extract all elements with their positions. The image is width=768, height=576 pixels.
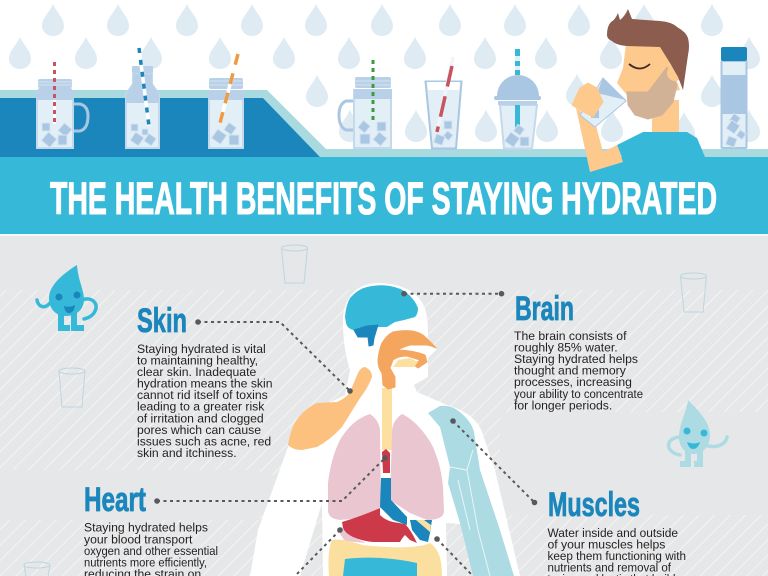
- text block: brain: [514, 290, 643, 412]
- text block: brain: The brain consists of: [514, 329, 627, 343]
- icon: takeaway cup with cyan straw: [494, 49, 541, 148]
- text block: brain: for longer periods.: [514, 398, 612, 412]
- text block: heart: nutrients more efficiently,: [84, 555, 207, 569]
- text block: skin: Skin: [137, 302, 187, 340]
- anatomy: kidney and vessels: [380, 478, 432, 542]
- text block: skin: clear skin. Inadequate: [137, 365, 256, 379]
- icon: empty glass left: [59, 368, 85, 407]
- header background: [0, 0, 768, 157]
- anatomy: heart: [382, 449, 390, 473]
- text block: heart: Heart: [84, 481, 146, 519]
- text block: skin: skin and itchiness.: [137, 446, 237, 460]
- text block: muscles: nutrients and removal of: [548, 561, 672, 575]
- anatomy: intestines: [328, 540, 442, 576]
- icon: jar with orange straw: [208, 54, 244, 148]
- text block: brain: Staying hydrated helps: [514, 352, 638, 366]
- background stripes: [0, 290, 768, 576]
- connector: heart: [154, 455, 388, 504]
- icon: water drop character blue: [37, 265, 96, 331]
- text block: brain: processes, increasing: [514, 375, 632, 389]
- icon: empty glass right: [680, 273, 706, 312]
- text block: skin: pores which can cause: [137, 423, 261, 437]
- icon: water drop character pale: [669, 400, 727, 467]
- anatomy: arm muscle: [428, 406, 514, 576]
- text block: muscles: Muscles: [548, 486, 640, 524]
- text block: skin: leading to a greater risk: [137, 400, 265, 414]
- panel: human body silhouette: [250, 283, 520, 576]
- text block: skin: of irritation and clogged: [137, 411, 264, 425]
- text block: muscles: [548, 486, 686, 576]
- icon: glass with red straw: [426, 57, 462, 148]
- icon: mason jar with red straw: [36, 62, 88, 148]
- icon: milk bottle with blue straw: [126, 48, 159, 148]
- anatomy: nasal passage and throat: [378, 331, 436, 450]
- icon: empty glass bottom left: [24, 562, 50, 576]
- title banner: [0, 157, 768, 236]
- anatomy: liver: [342, 508, 417, 543]
- text block: brain: your ability to concentrate: [514, 387, 643, 401]
- text block: brain: roughly 85% water.: [514, 341, 618, 355]
- text block: skin: hydration means the skin: [137, 377, 272, 391]
- counter top: [0, 90, 768, 157]
- text block: heart: your blood transport: [84, 532, 193, 546]
- text block: skin: [137, 302, 272, 460]
- connector: lower right: [434, 536, 473, 576]
- text block: skin: cannot rid itself of toxins: [137, 388, 268, 402]
- connector: skin: [195, 319, 353, 394]
- text block: skin: issues such as acne, red: [137, 434, 271, 448]
- illustration: man drinking water: [572, 9, 705, 172]
- connector: brain: [401, 291, 504, 297]
- text block: heart: Staying hydrated helps: [84, 521, 208, 535]
- icon: water bottle: [721, 47, 747, 148]
- anatomy: lungs: [328, 414, 444, 520]
- text block: muscles: of your muscles helps: [548, 538, 665, 552]
- icon: mug with green straw: [339, 60, 392, 148]
- anatomy: brain: [345, 285, 418, 346]
- water drop pattern: [9, 4, 760, 144]
- icon: empty glass top centre: [282, 245, 308, 283]
- text block: brain: Brain: [515, 290, 574, 328]
- text block: skin: to maintaining healthy,: [137, 354, 258, 368]
- text block: muscles: Water inside and outside: [548, 526, 678, 540]
- text block: muscles: keep them functioning with: [548, 549, 686, 563]
- text block: heart: oxygen and other essential: [84, 544, 218, 558]
- anatomy: trapezius skin area: [288, 367, 372, 450]
- connector: muscles: [450, 418, 537, 505]
- text block: heart: [84, 481, 218, 576]
- text block: skin: Staying hydrated is vital: [137, 342, 266, 356]
- anatomy: stomach edge: [340, 527, 366, 543]
- text block: brain: thought and memory: [514, 364, 627, 378]
- connector: lower left: [295, 527, 343, 576]
